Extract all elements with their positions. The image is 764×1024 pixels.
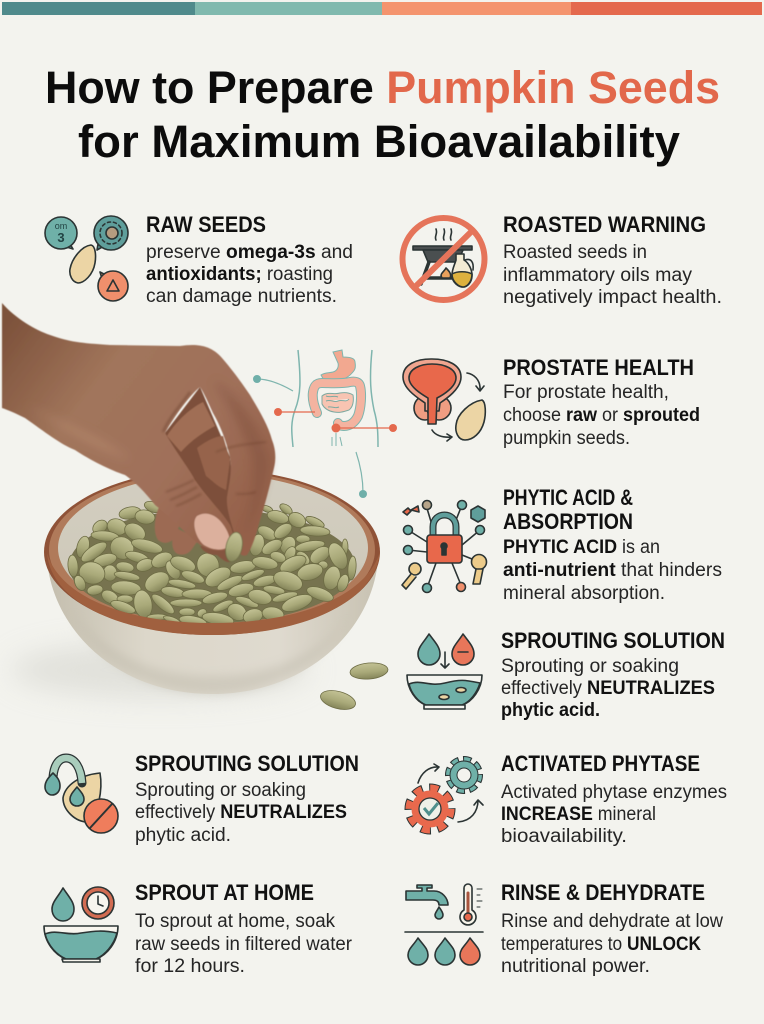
photo: hand picking seeds [2, 303, 275, 563]
back of hand, index finger and thumb [2, 303, 275, 556]
gap between thumb and index finger [165, 387, 240, 560]
text block: bioavailability. [501, 826, 627, 847]
heading: RAW SEEDS [146, 212, 266, 237]
text block: for 12 hours. [135, 956, 245, 977]
curled fingers [155, 402, 235, 562]
bowl front rim [47, 552, 380, 635]
icon: water drops and bowl [407, 634, 482, 709]
panel: roasted warning [402, 212, 722, 308]
text block: can damage nutrients. [146, 286, 337, 307]
icon: padlock network with keys [402, 500, 486, 592]
text block [146, 242, 353, 307]
text block: inflammatory oils may [503, 265, 693, 286]
text block: preserve omega-3s and [146, 242, 353, 263]
top colour bar [2, 2, 762, 15]
text block: Roasted seeds in [503, 242, 647, 263]
heading: SPROUT AT HOME [135, 880, 314, 905]
icon: dripping seed with no sign [45, 758, 118, 833]
text block: pumpkin seeds. [503, 428, 630, 449]
heading: ROASTED WARNING [503, 212, 706, 237]
panel: raw seeds [45, 212, 353, 307]
text block: Activated phytase enzymes [501, 782, 727, 803]
text block: mineral absorption. [503, 583, 665, 604]
icon: gears with check [409, 760, 483, 830]
heading: SPROUTING SOLUTION [135, 751, 359, 776]
icon: drop, clock and bowl [44, 887, 118, 962]
heading [503, 485, 633, 534]
text block: negatively impact health. [503, 287, 722, 308]
seeds in bowl [67, 499, 357, 628]
panel: activated phytase [409, 751, 727, 847]
pinched seed [223, 531, 245, 563]
icon: seed with nutrient bubbles: 3 [57, 230, 65, 245]
text block: Sprouting or soaking [135, 780, 306, 801]
text block: phytic acid. [501, 700, 600, 721]
panel: sprouting solution left [45, 751, 359, 846]
text block [501, 656, 715, 721]
title: How to Prepare Pumpkin Seeds [45, 62, 720, 113]
illustration: digestive system diagram [253, 350, 397, 498]
thumbnail [194, 514, 230, 549]
heading: ACTIVATED PHYTASE [501, 751, 700, 776]
text block: effectively NEUTRALIZES [135, 802, 347, 823]
title [45, 62, 720, 167]
text block: raw seeds in filtered water [135, 934, 353, 955]
panel: phytic acid and absorption [402, 485, 722, 604]
text block: phytic acid. [135, 825, 231, 846]
text block [503, 537, 722, 604]
icon: no roasting in oil [402, 218, 484, 300]
text block: To sprout at home, soak [135, 911, 335, 932]
text block: PHYTIC ACID is an [503, 537, 660, 558]
photo: bowl of pumpkin seeds [10, 469, 389, 713]
icon: seed with nutrient bubbles: om [55, 221, 67, 231]
heading: PHYTIC ACID & [503, 485, 633, 510]
text block: choose raw or sprouted [503, 405, 700, 426]
text block: Rinse and dehydrate at low [501, 911, 723, 932]
text block [503, 242, 722, 308]
icon: prostate and seed [403, 359, 485, 441]
text block: temperatures to UNLOCK [501, 934, 701, 955]
panel: rinse and dehydrate [405, 880, 723, 977]
bowl shadow [10, 642, 310, 698]
text block: anti-nutrient that hinders [503, 560, 722, 581]
panel: sprouting solution right [407, 628, 725, 721]
text block: For prostate health, [503, 382, 669, 403]
text block [135, 780, 347, 846]
text block [503, 382, 700, 449]
text block: INCREASE mineral [501, 804, 656, 825]
text block [501, 911, 723, 977]
text block: antioxidants; roasting [146, 264, 333, 285]
text block: nutritional power. [501, 956, 650, 977]
text block [135, 911, 353, 977]
hand shading and creases [20, 380, 269, 540]
heading: ABSORPTION [503, 509, 633, 534]
panel: prostate health [403, 355, 700, 449]
heading: RINSE & DEHYDRATE [501, 880, 705, 905]
icon: tap, thermometer and drops [405, 884, 483, 965]
text block: effectively NEUTRALIZES [501, 678, 715, 699]
heading: PROSTATE HEALTH [503, 355, 694, 380]
heading: SPROUTING SOLUTION [501, 628, 725, 653]
title: for Maximum Bioavailability [78, 116, 680, 167]
panel: sprout at home [44, 880, 353, 977]
loose seeds [318, 661, 389, 713]
ceramic bowl [44, 469, 380, 694]
icon: seed with nutrient bubbles [45, 216, 128, 301]
text block: Sprouting or soaking [501, 656, 679, 677]
text block [501, 782, 727, 847]
